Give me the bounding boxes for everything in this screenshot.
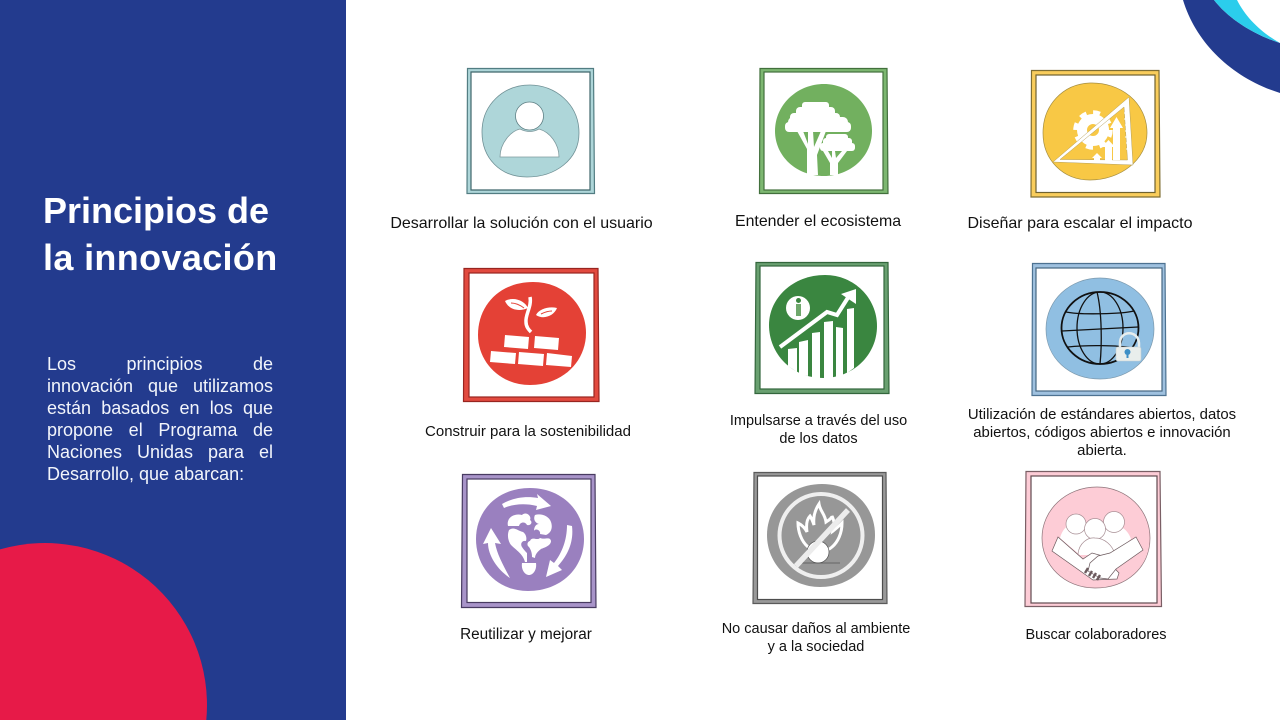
label: sustainability: Construir para la sostenibilidad: [425, 423, 631, 440]
intro text: [47, 354, 273, 484]
intro text: propone el Programa de: [47, 420, 273, 440]
label: open standards: abierta.: [1077, 443, 1127, 459]
label: do no harm: y a la sociedad: [768, 639, 864, 655]
icon: scale impact: [1031, 70, 1160, 197]
icon: reuse and improve: [462, 474, 596, 608]
intro text: están basados en los que: [47, 398, 273, 418]
top right corner arcs: [1183, 0, 1280, 93]
label: do no harm: No causar daños al ambiente: [722, 621, 910, 637]
label: data: Impulsarse a través del uso: [730, 413, 907, 429]
red decorative circle: [0, 543, 207, 720]
intro text: Desarrollo, que abarcan:: [47, 464, 244, 484]
left navy panel: [0, 0, 346, 720]
label: data: [730, 413, 907, 447]
label: open standards: [968, 407, 1236, 459]
title: [43, 190, 278, 278]
label: open standards: Utilización de estándares abiertos, datos: [968, 407, 1236, 423]
icon: user: [467, 68, 594, 194]
label: open standards: abiertos, códigos abiertos e innovación: [973, 425, 1231, 441]
intro text: Naciones Unidas para el: [47, 442, 273, 462]
label: collaborators: Buscar colaboradores: [1025, 627, 1167, 643]
label: user: Desarrollar la solución con el usuario: [390, 215, 653, 232]
title: la innovación: [43, 236, 278, 278]
icon: do no harm: [753, 472, 887, 604]
label: scale: Diseñar para escalar el impacto: [968, 215, 1192, 232]
label: ecosystem: Entender el ecosistema: [735, 213, 901, 230]
icon: collaborators: [1025, 472, 1162, 606]
label: do no harm: [722, 621, 910, 655]
icon: trees: [760, 68, 888, 194]
icon: data chart: [755, 262, 889, 394]
title: Principios de: [43, 190, 269, 231]
label: reuse: Reutilizar y mejorar: [460, 626, 592, 643]
icon: open globe: [1032, 264, 1166, 396]
intro text: Los principios de: [47, 354, 273, 374]
intro text: innovación que utilizamos: [47, 376, 273, 396]
label: data: de los datos: [779, 431, 858, 447]
icon: sustainability: [464, 268, 599, 402]
